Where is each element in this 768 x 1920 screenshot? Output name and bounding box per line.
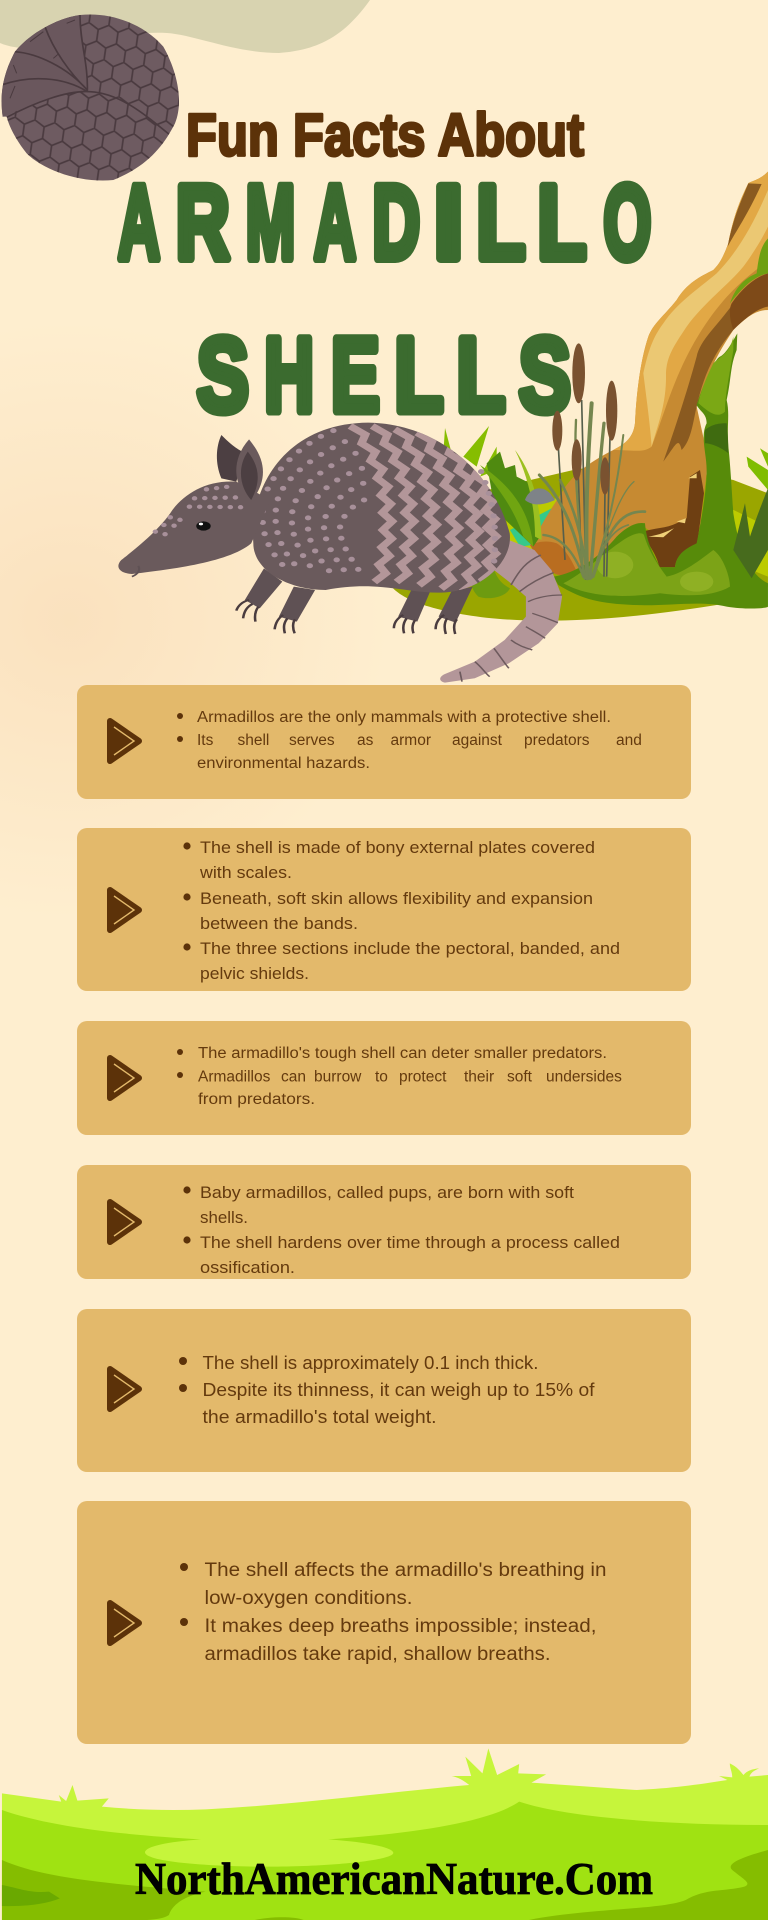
text [200,1184,620,1277]
tail [440,540,562,683]
text: Armadillos are the only mammals with a protective shell. [197,709,611,726]
text: Beneath, soft skin allows flexibility and expansion [200,890,593,908]
grass right [733,448,768,578]
text: shells. [200,1209,248,1227]
text [202,1353,596,1427]
text: from predators. [198,1091,315,1108]
illustration: tree stump, moss and reeds [385,172,768,621]
text: between the bands. [200,915,358,933]
illustration: grass hills [2,1748,768,1920]
title: SHELLS: S [519,317,571,434]
head [118,482,270,574]
text: The shell is approximately 0.1 inch thick. [202,1353,538,1373]
text: The armadillo's tough shell can deter smaller predators. [198,1045,607,1062]
moss [470,238,768,609]
title: ARMADILLO: M [246,164,295,282]
footer website text: NorthAmericanNature.Com [135,1854,653,1904]
icon: arrow [110,1603,139,1643]
bullets [177,713,183,742]
title: ARMADILLO: O [604,164,651,282]
title: SHELLS: S [197,317,249,434]
text: pelvic shields. [200,965,309,983]
title: Fun Facts About: Fun Facts About [186,102,584,168]
text line 2: predators [524,732,590,749]
panel 5 [77,1309,691,1472]
front ear [236,439,263,502]
grass left [443,426,542,547]
title: SHELLS: E [331,317,380,434]
bullets [180,1563,188,1626]
legs [236,568,473,634]
title: ARMADILLO: A [118,164,160,282]
bullets [183,842,191,951]
text line 2: as [357,732,374,749]
text line 2: against [452,732,503,749]
text line 2: armor [390,732,431,749]
text: Baby armadillos, called pups, are born with soft [200,1184,574,1202]
panel 1 [77,685,691,799]
text: burrow [314,1068,362,1086]
icon: rolled armadillo ball [2,14,179,180]
icon: arrow [110,890,139,930]
head dots [155,486,249,535]
ground [385,460,768,621]
shell dots [263,431,495,575]
text: ossification. [200,1259,295,1277]
text: to [375,1068,388,1086]
tree trunk [530,172,768,575]
text: Despite its thinness, it can weigh up to 15% of [202,1380,596,1400]
bullets [179,1357,187,1392]
text: The three sections include the pectoral, banded, and [200,940,620,958]
title: ARMADILLO: L [537,164,586,282]
text line 3: environmental hazards. [197,755,370,772]
text: armadillos take rapid, shallow breaths. [204,1644,550,1665]
title: ARMADILLO: L [476,164,525,282]
bullets [183,1186,191,1244]
bullets [177,1049,183,1078]
title: ARMADILLO: R [176,164,230,282]
text [199,839,620,983]
eye [196,521,211,531]
shell bands [350,426,497,597]
back ear [217,435,245,482]
icon: arrow [110,1369,139,1409]
text: with scales. [199,864,292,882]
icon: arrow [110,1202,139,1242]
text [198,1045,622,1108]
text line 2: serves [289,732,335,749]
title: SHELLS: H [264,317,314,434]
mouth [132,566,139,577]
text line 2: and [616,732,642,749]
text: can [281,1068,306,1086]
text [204,1560,606,1665]
text line 2: Its [197,732,214,749]
reeds [539,343,645,580]
panel 6 [77,1501,691,1744]
title: SHELLS: L [394,317,443,434]
decorative blob top left [0,0,370,53]
title: ARMADILLO: A [314,164,356,282]
text: It makes deep breaths impossible; instead, [204,1616,596,1637]
text: The shell affects the armadillo's breathing in [204,1560,606,1581]
body shell [253,423,510,593]
icon: arrow [110,721,139,761]
panel 4 [77,1165,691,1279]
text: The shell hardens over time through a process called [200,1234,620,1252]
title: ARMADILLO: I [434,164,464,282]
illustration: armadillo [118,423,562,683]
panel 3 [77,1021,691,1135]
text: the armadillo's total weight. [202,1407,436,1427]
text line 2: shell [238,732,269,749]
title: ARMADILLO: D [372,164,420,282]
rock [525,488,555,504]
text: The shell is made of bony external plates covered [200,839,595,857]
icon: arrow [110,1058,139,1098]
text: soft [507,1068,533,1086]
text: Armadillos [198,1068,271,1086]
text: undersides [546,1068,622,1086]
title: SHELLS: L [456,317,505,434]
text: their [464,1068,494,1086]
text: protect [399,1068,447,1086]
panel 2 [77,828,691,991]
text: low-oxygen conditions. [204,1588,412,1609]
